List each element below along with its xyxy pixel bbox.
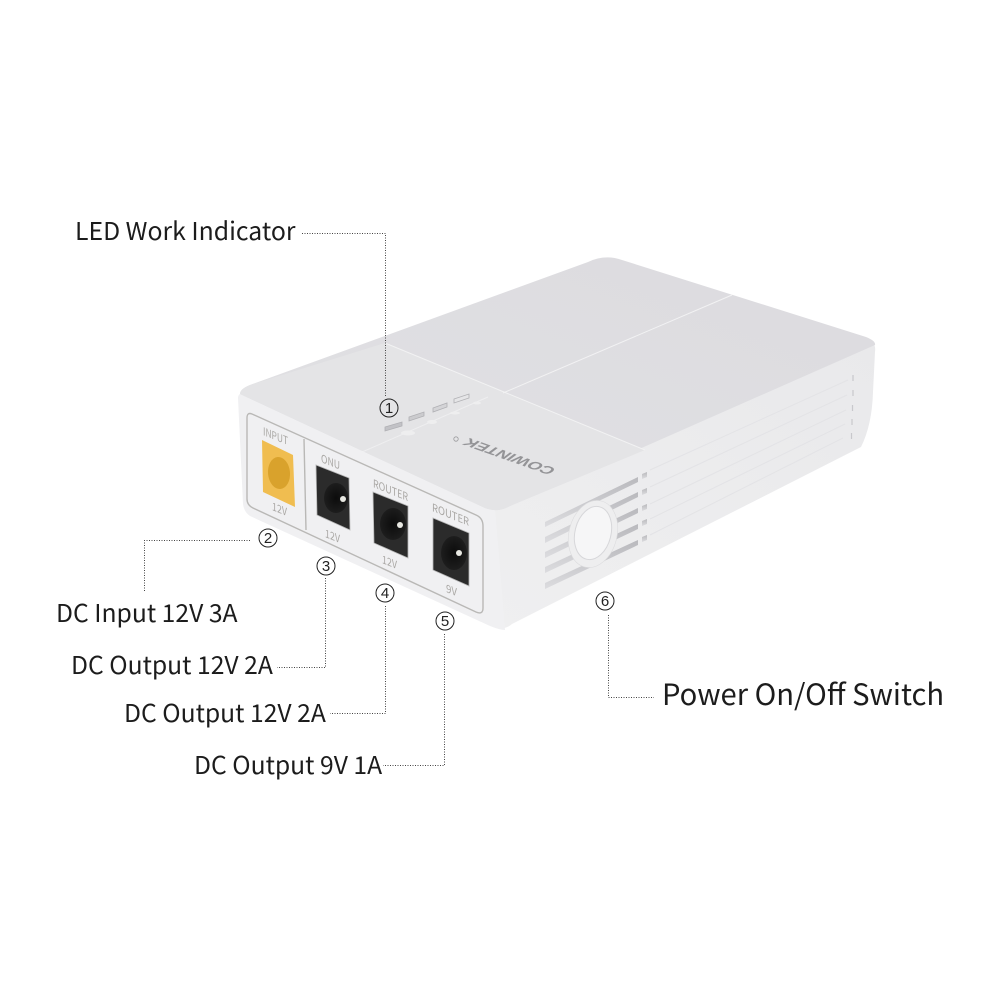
leader line: LED bbox=[302, 234, 386, 396]
side face grooves bbox=[650, 380, 848, 535]
output port ROUTER 9V: 9V bbox=[446, 580, 457, 600]
status icons bbox=[385, 394, 469, 431]
DC input port: INPUT bbox=[263, 423, 288, 449]
registered mark bbox=[454, 437, 458, 441]
output port ONU: ONU bbox=[321, 450, 340, 474]
device front face bbox=[238, 392, 505, 630]
LED lenses bbox=[401, 402, 481, 436]
output port ROUTER 9V bbox=[432, 499, 469, 600]
power switch bbox=[561, 495, 625, 573]
label: DC Output 1: DC Output 12V 2A bbox=[71, 646, 273, 682]
leader line: output 3 bbox=[383, 634, 444, 766]
marker 2: 2 bbox=[264, 530, 272, 547]
port panel divider bbox=[304, 439, 306, 530]
output port ROUTER 12V: ROUTER bbox=[373, 475, 408, 505]
marker 6: 6 bbox=[601, 593, 609, 610]
output port ONU bbox=[316, 450, 350, 547]
DC input port: 12V bbox=[272, 498, 287, 520]
output port ROUTER 12V: 12V bbox=[382, 551, 397, 573]
marker 1 bbox=[380, 399, 398, 417]
output port ROUTER 9V: ROUTER bbox=[432, 499, 469, 530]
marker 4 bbox=[376, 584, 394, 602]
brand text COWINTEK: COWINTEK bbox=[459, 435, 560, 476]
label: DC Output 2: DC Output 12V 2A bbox=[124, 694, 326, 730]
label: DC Output 3: DC Output 9V 1A bbox=[194, 746, 382, 782]
LED indicators bbox=[385, 394, 481, 436]
port panel outline bbox=[247, 414, 483, 613]
marker 3: 3 bbox=[322, 558, 330, 575]
leader line: switch bbox=[608, 615, 654, 698]
marker 5 bbox=[436, 612, 454, 630]
marker 5: 5 bbox=[441, 613, 449, 630]
leader line: output 1 bbox=[277, 578, 326, 668]
product: power supply device bbox=[238, 257, 875, 630]
label: DC Input: DC Input 12V 3A bbox=[56, 594, 238, 630]
marker 1: 1 bbox=[385, 400, 393, 417]
device top face bbox=[240, 257, 875, 510]
marker 6 bbox=[596, 592, 614, 610]
output port ONU: 12V bbox=[325, 525, 340, 547]
label: Power switch: Power On/Off Switch bbox=[662, 672, 944, 714]
label: LED Work Indicator: LED Work Indicator bbox=[75, 212, 296, 248]
marker 4: 4 bbox=[381, 585, 389, 602]
marker 3 bbox=[317, 557, 335, 575]
output port ROUTER 12V bbox=[373, 475, 408, 573]
side face end marks bbox=[852, 375, 853, 439]
leader line: DC input bbox=[144, 540, 250, 592]
front section of top face bbox=[240, 343, 645, 510]
marker 2 bbox=[259, 529, 277, 547]
leader line: output 2 bbox=[330, 606, 386, 714]
top face seams bbox=[362, 295, 732, 452]
DC input port bbox=[262, 423, 295, 520]
device side face bbox=[490, 342, 875, 628]
ventilation slots bbox=[545, 472, 647, 589]
